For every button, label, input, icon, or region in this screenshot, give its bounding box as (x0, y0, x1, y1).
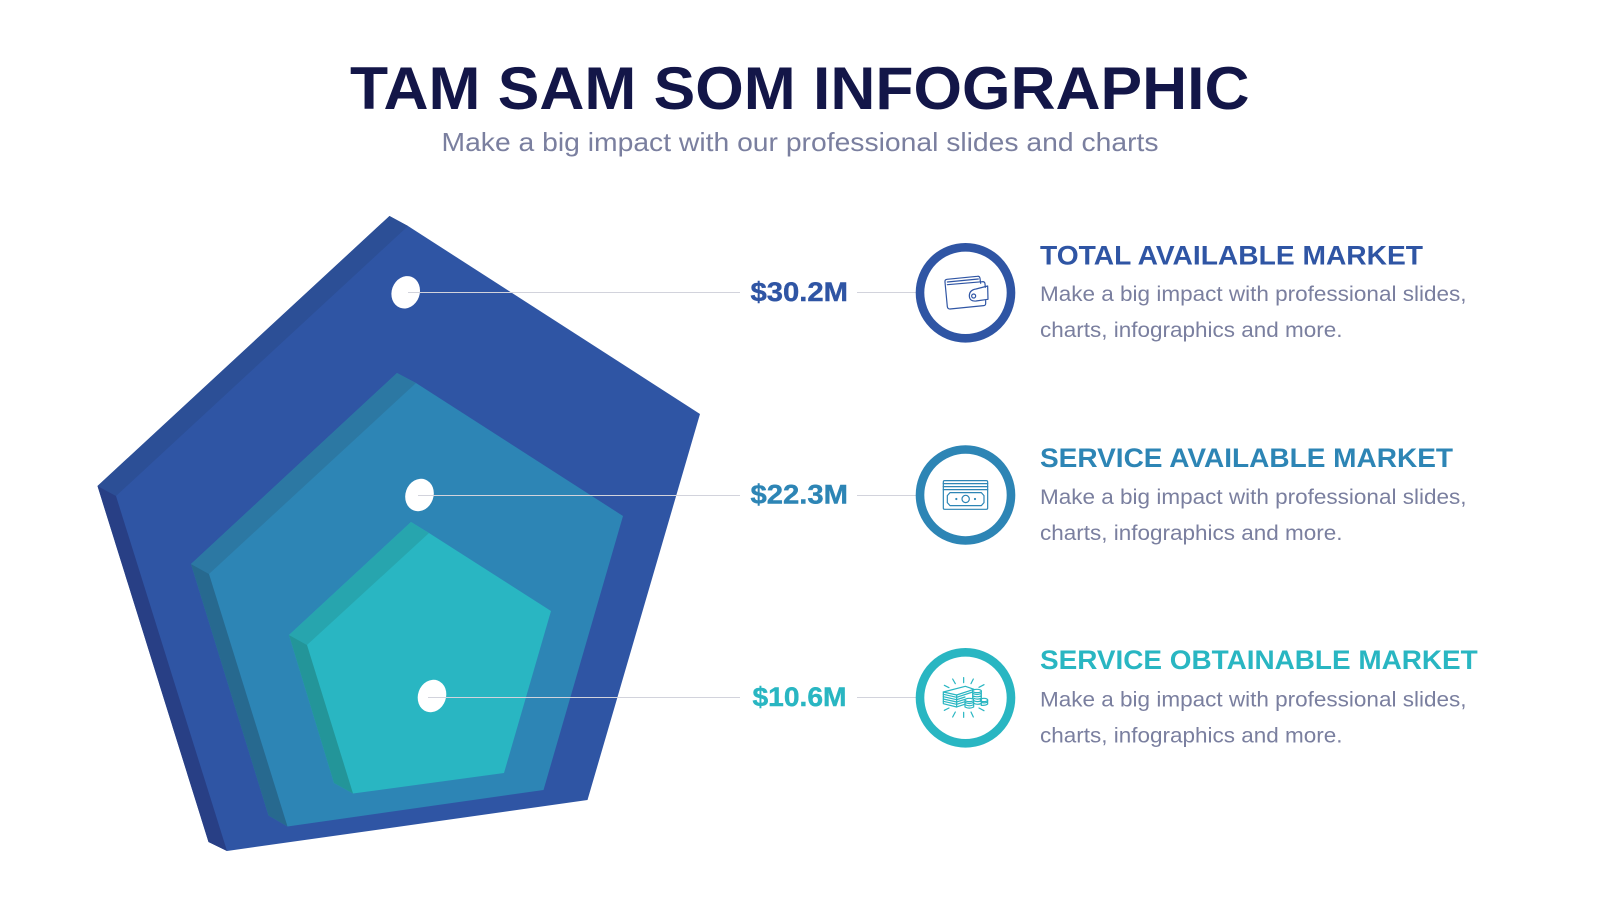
connector line (418, 494, 740, 496)
value: $10.6M (752, 682, 846, 712)
connector line (428, 696, 740, 698)
marker dot (387, 272, 424, 313)
description (1040, 486, 1466, 545)
marker row: service available market (401, 475, 916, 515)
description: Make a big impact with professional slides, (1040, 283, 1466, 306)
value: $30.2M (750, 277, 848, 307)
heading: TOTAL AVAILABLE MARKET (1040, 240, 1424, 270)
description (1040, 688, 1466, 748)
subtitle: Make a big impact with our professional slides and charts (442, 127, 1158, 157)
middle pentagon: service available market (191, 373, 623, 826)
marker dot (401, 475, 438, 515)
marker row: total available market (387, 272, 916, 313)
description: charts, infographics and more. (1040, 522, 1342, 545)
heading: SERVICE AVAILABLE MARKET (1040, 443, 1454, 473)
connector line to icon (857, 494, 916, 496)
title: TAM SAM SOM INFOGRAPHIC (350, 55, 1250, 122)
heading: SERVICE OBTAINABLE MARKET (1040, 645, 1478, 675)
text block: service obtainable market (1040, 645, 1478, 748)
marker dot (413, 676, 451, 716)
connector line to icon (857, 696, 916, 698)
description: charts, infographics and more. (1040, 724, 1342, 748)
pentagon chart (98, 216, 700, 851)
description: Make a big impact with professional slides, (1040, 486, 1466, 509)
connector line (408, 292, 740, 294)
icon: banknote in ring (920, 450, 1011, 540)
description: Make a big impact with professional slides, (1040, 688, 1466, 712)
connector line to icon (857, 292, 916, 294)
description: charts, infographics and more. (1040, 319, 1342, 342)
description (1040, 283, 1466, 342)
text block: total available market (1040, 240, 1466, 342)
text block: service available market (1040, 443, 1466, 545)
value: $22.3M (750, 480, 848, 510)
outer pentagon: total available market (98, 216, 700, 851)
marker row: service obtainable market (413, 676, 916, 716)
icon: money stack in ring (920, 652, 1011, 743)
inner pentagon: service obtainable market (289, 522, 551, 794)
icon: wallet in ring (920, 247, 1011, 338)
